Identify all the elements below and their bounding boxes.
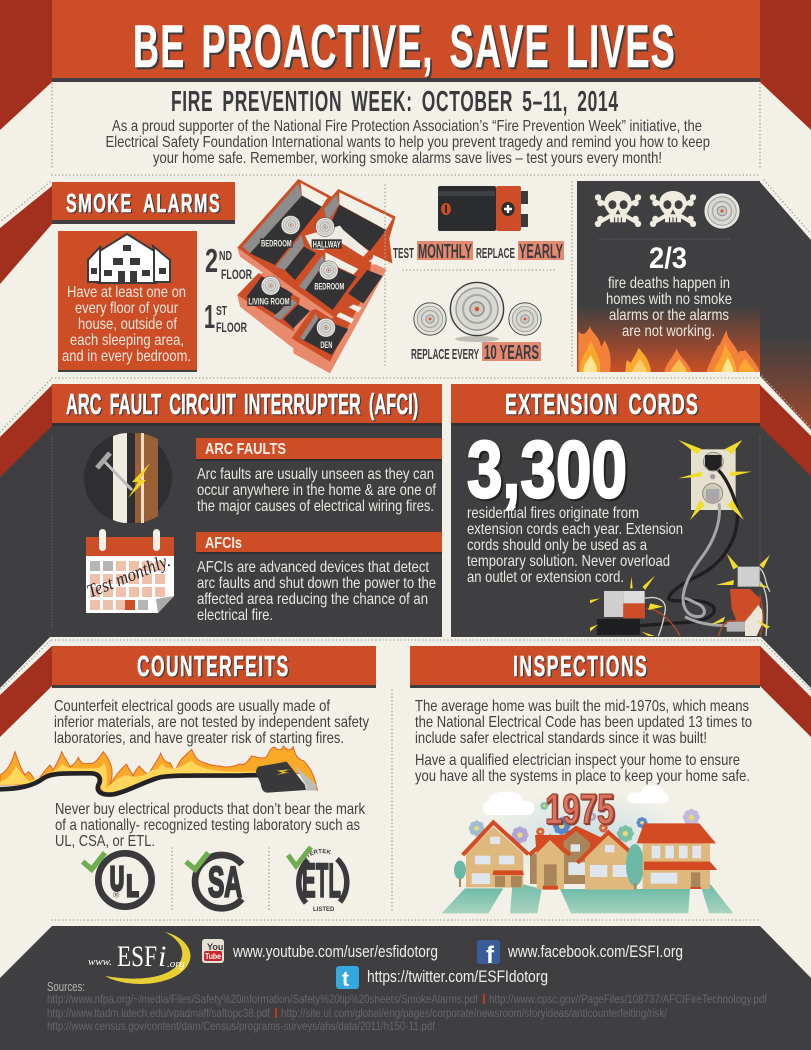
statistic: 3,300: residential fires originate from (467, 505, 639, 522)
statistic: 3,300: 3,300 (467, 425, 627, 515)
alarm icons (261, 215, 338, 337)
text: twitter url: https://twitter.com/ESFIdotorg (367, 967, 548, 986)
statistic: 3,300: an outlet or extension cord. (467, 569, 624, 586)
panel: 2/3 statistic: homes with no smoke (606, 291, 732, 308)
first floor (237, 263, 390, 373)
afcis text (196, 532, 442, 624)
heading: counterfeits (0, 646, 376, 737)
icon: twitter: t (342, 968, 349, 991)
warning text: UL, CSA, or ETL. (55, 833, 155, 850)
icon: three smoke alarms (414, 282, 541, 342)
heading: extension cords (451, 384, 760, 426)
inspections text (415, 698, 752, 785)
sources: http://www.nfpa.org/~/media/Files/Safety%20information/Safety%20tip%20sheets/SmokeAlarms.pdf (47, 992, 479, 1006)
panel: alarm placement (58, 231, 197, 372)
middle house (529, 826, 610, 890)
year: 1975 (545, 786, 614, 834)
black cord (640, 470, 737, 626)
arc faults text (196, 438, 442, 515)
logo: ESFi: ESF (117, 940, 157, 973)
panel: 2/3 statistic: alarms or the alarms (609, 307, 729, 324)
sources: http://www.ltadm.latech.edu/vpadmaff/saftopc38.pdf (47, 1006, 271, 1020)
icon: battery (438, 186, 528, 231)
icon: facebook (477, 940, 500, 969)
arc faults text: occur anywhere in the home & are one of (197, 482, 436, 499)
counterfeits text: inferior materials, are not tested by independent safety (54, 714, 369, 731)
panel: alarm placement: each sleeping area, (70, 332, 184, 349)
test monthly replace yearly: TEST (393, 245, 414, 262)
logo: ESFi: www. (88, 956, 112, 968)
warning text: Never buy electrical products that don’t bear the mark (55, 801, 366, 818)
heading: inspections (410, 646, 811, 737)
arc faults text: ARC FAULTS (205, 441, 286, 458)
afcis text: electrical fire. (197, 607, 273, 624)
icon: skull one (595, 191, 641, 227)
room labels: BEDROOM (261, 238, 292, 248)
warning text (55, 801, 366, 850)
icon: youtube: Tube (205, 952, 221, 961)
power strips (597, 567, 763, 636)
statistic: 3,300 (467, 425, 683, 586)
panel: 2/3 statistic: 2/3 (649, 242, 687, 275)
text: youtube url: www.youtube.com/user/esfidotorg (232, 942, 438, 961)
second floor (237, 179, 396, 319)
test monthly replace yearly: REPLACE (476, 245, 515, 262)
floor labels: ND (219, 248, 232, 263)
illustration: burning cord (0, 746, 317, 795)
replace every 10 years: REPLACE EVERY (411, 346, 479, 363)
logo: ESFi (88, 932, 190, 984)
icon: youtube (202, 939, 224, 963)
replace every 10 years: 10 YEARS (484, 342, 539, 364)
sources: http://www.census.gov/content/dam/Census/programs-surveys/ahs/data/2011/h150-11.pdf (47, 1019, 436, 1033)
title banner (0, 0, 811, 130)
text: facebook url: www.facebook.com/ESFI.org (507, 942, 683, 961)
floor labels: 1 (204, 298, 215, 335)
heading: extension cords: EXTENSION CORDS (505, 389, 698, 421)
icon: houses (88, 234, 170, 283)
intro: FIRE PREVENTION WEEK: OCTOBER 5–11, 2014 (171, 86, 619, 118)
warning text: of a nationally- recognized testing laboratory such as (55, 817, 360, 834)
floor labels: FLOOR (216, 319, 247, 335)
counterfeits text: Counterfeit electrical goods are usually made of (54, 698, 330, 715)
test monthly replace yearly: MONTHLY (418, 241, 472, 263)
cream lower background (0, 637, 811, 978)
icon: youtube: You (207, 942, 223, 952)
icon: damaged wire (84, 433, 172, 523)
afcis text: AFCIs are advanced devices that detect (197, 559, 429, 576)
panel wings: middle sections (0, 385, 52, 477)
sparks (590, 440, 770, 636)
floor labels (204, 242, 252, 335)
inspections text: include safer electrical standards since it was built! (415, 730, 707, 747)
illustration: overloaded outlet and cords (590, 440, 770, 636)
lawn (442, 882, 733, 913)
logo: ESFi: .org (167, 958, 185, 970)
panel: 2/3 statistic (577, 181, 760, 372)
panel: 2/3 statistic: are not working. (622, 323, 715, 340)
logo: ETL: LISTED (313, 907, 335, 913)
arc faults text: Arc faults are usually unseen as they can (197, 466, 434, 483)
statistic: 3,300: temporary solution. Never overload (467, 553, 670, 570)
afcis text: affected area reducing the chance of an (197, 591, 428, 608)
icon: flames (578, 326, 760, 372)
afcis text: AFCIs (205, 535, 242, 552)
smoke alarms side wings (0, 180, 811, 430)
room labels (247, 238, 345, 350)
floor labels: ST (216, 303, 227, 318)
arc faults text: the major causes of electrical wiring fires. (197, 498, 434, 515)
heading: smoke alarms (52, 182, 235, 224)
statistic: 3,300: extension cords each year. Extension (467, 521, 683, 538)
icon: smoke alarm (704, 193, 740, 229)
room labels: BEDROOM (314, 281, 344, 291)
sources: http://site.ul.com/global/eng/pages/corporate/newsroom/storyideas/anticounterfeiting/risk/ (281, 1006, 668, 1020)
logo: UL: U (110, 861, 124, 898)
icon: calendar (84, 529, 174, 613)
title banner: BE PROACTIVE, SAVE LIVES (133, 14, 675, 80)
dark middle background (0, 385, 811, 688)
sources: Sources: (47, 979, 85, 994)
panel: alarm placement: Have at least one on (67, 284, 186, 301)
heading: counterfeits: COUNTERFEITS (137, 651, 288, 683)
logo: ETL (286, 846, 350, 913)
inspections text: Have a qualified electrician inspect your home to ensure (415, 752, 740, 769)
sources (47, 979, 768, 1033)
test monthly replace yearly: YEARLY (519, 241, 563, 263)
statistic: 3,300: cords should only be used as a (467, 537, 647, 554)
logo: CSA: SA (208, 859, 242, 907)
room labels: HALLWAY (313, 239, 341, 249)
afcis text: arc faults and shut down the power to the (197, 575, 436, 592)
icon: outlet (691, 449, 736, 510)
floor plan diagram (237, 179, 396, 373)
logo: UL: L (127, 870, 139, 903)
panel: alarm placement: and in every bedroom. (62, 348, 191, 365)
left house (454, 822, 528, 887)
logo: UL: ® (113, 890, 119, 899)
loose wires (645, 568, 770, 636)
text: ETL (302, 855, 341, 908)
clouds (483, 786, 669, 815)
intro: your home safe. Remember, working smoke alarms save lives – test yours every month! (153, 150, 662, 167)
test monthly replace yearly (393, 241, 564, 263)
flowers (472, 803, 697, 840)
panel: alarm placement: every floor of your (75, 300, 179, 317)
panel: alarm placement: house, outside of (78, 316, 177, 333)
icon: twitter (336, 966, 359, 991)
icon: calendar: Test monthly. (84, 550, 173, 603)
logo: ESFi: i (158, 940, 166, 973)
heading: afci (52, 384, 442, 426)
intro (106, 86, 710, 167)
floor labels: 2 (205, 242, 218, 279)
heading: smoke alarms: SMOKE ALARMS (66, 188, 220, 218)
heading: afci: ARC FAULT CIRCUIT INTERRUPTER (AFCI) (66, 388, 418, 420)
illustration: 1975 houses (442, 786, 733, 913)
icon: skull two (650, 191, 696, 227)
heading: inspections: INSPECTIONS (513, 651, 647, 683)
room labels: LIVING ROOM (248, 297, 290, 307)
logo: CSA (186, 853, 242, 908)
logo: ETL: INTERTEK (302, 848, 331, 862)
grey cord (683, 503, 730, 626)
counterfeits text: laboratories, and have greater risk of starting fires. (54, 730, 344, 747)
footer band (0, 926, 811, 1050)
counterfeits text (54, 698, 369, 747)
logo: UL (83, 853, 152, 907)
right house (637, 823, 717, 889)
floor labels: FLOOR (221, 266, 252, 282)
third house (577, 832, 644, 890)
room labels: DEN (320, 340, 332, 350)
panel: 2/3 statistic: fire deaths happen in (608, 275, 730, 292)
icon: facebook: f (486, 942, 495, 969)
